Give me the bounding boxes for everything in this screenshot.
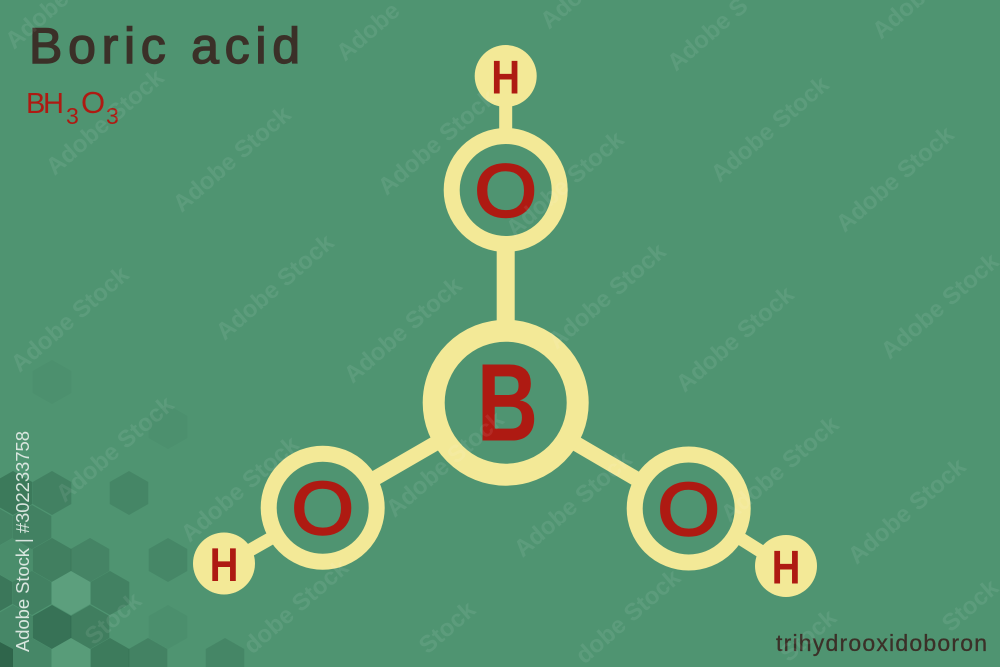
watermarks: Adobe Stock [706,71,835,188]
atom: right oxygen [635,454,743,562]
chemical formula: H [43,88,64,120]
cropped watermarks: Stock [775,604,842,667]
IUPAC name: trihydrooxidoboron [776,630,987,656]
watermarks: Adobe Stock [671,281,800,398]
watermarks: Adobe Stock [339,272,468,389]
cropped watermarks: dobe Stock [239,554,354,659]
atom: left oxygen [269,454,377,562]
bonds [245,100,765,554]
atom: boron [434,331,578,475]
watermarks: Adobe Stock [51,391,180,508]
molecule: boric acid structure [193,45,817,597]
watermarks: Adobe Stock [543,238,672,355]
watermarks: Adobe Stock [6,261,135,378]
atom: top hydrogen: H [491,53,520,104]
watermarks [6,64,1000,570]
watermarks: Adobe Stock [831,121,960,238]
watermarks: Adobe Stock [381,406,510,523]
chemical formula: 3 [106,103,119,129]
watermarks: Adobe Stock [501,126,630,243]
atom: left hydrogen: H [210,540,238,592]
watermarks: Adobe Stock [168,101,297,218]
watermarks: Adobe Stock [373,84,502,201]
watermarks: Adobe Stock [716,411,845,528]
atom: top hydrogen [475,45,537,107]
atom: top oxygen: O [475,150,537,233]
watermarks: Adobe Stock [176,431,305,548]
atom: boron: B [477,341,538,464]
hexagon background pattern [0,360,244,667]
watermarks: Adobe Stock [509,446,638,563]
atom: top oxygen [452,136,560,244]
chemical formula: 3 [66,103,79,129]
atom: right hydrogen: H [772,543,800,594]
watermarks: Adobe Stock [211,229,340,346]
chemical formula: O [81,85,105,120]
cropped watermarks: Stock [80,587,147,650]
chemical formula: B [26,88,45,120]
watermarks: Adobe Stock [41,64,170,181]
atom: left oxygen: O [292,468,354,551]
atom: right oxygen: O [658,469,720,551]
watermarks: Adobe Stock [843,453,972,570]
title: Boric acid [29,18,300,74]
cropped watermarks [80,554,1000,667]
stock ID side label: Adobe Stock | #302233758 [12,431,33,652]
cropped watermarks: dobe Stock [571,564,686,667]
atom: right hydrogen [755,535,817,597]
atom: left hydrogen [193,532,255,594]
top edge watermarks [0,0,941,77]
cropped watermarks: Stock [414,596,481,659]
